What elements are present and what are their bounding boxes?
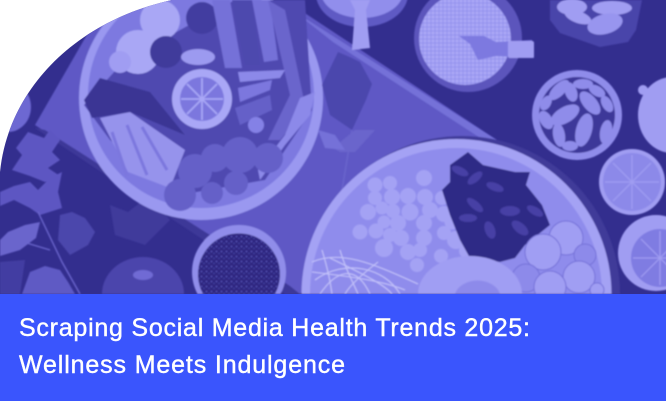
cashew dish (550, 0, 642, 47)
parsley sprig lower left (0, 130, 170, 294)
parsley on the board (318, 52, 375, 190)
lemon slice right (599, 149, 665, 215)
big plate (302, 136, 620, 294)
small dark dressing bowl (192, 225, 286, 294)
title banner (0, 294, 666, 401)
title text: Scraping Social Media Health Trends 2025: (19, 314, 530, 342)
vegetable bowl (79, 0, 323, 220)
chickpeas (352, 170, 473, 272)
avocado half (418, 256, 522, 294)
tomato halves (164, 137, 283, 211)
almond bowl (532, 70, 622, 160)
pistachio bowl (316, 0, 408, 50)
seed bowl with scoop (414, 0, 534, 92)
shredded sprouts (312, 250, 418, 294)
tomato (102, 257, 184, 294)
whole lemon (638, 77, 666, 153)
lemon slice (172, 69, 232, 129)
lemon half lower right (618, 215, 666, 291)
title text (19, 314, 530, 379)
hero photo: food flat lay in duotone (0, 0, 666, 294)
small dish at left edge (8, 94, 32, 133)
roasted vegetables (84, 0, 315, 195)
kidney beans (442, 152, 550, 262)
cutting board (35, 0, 500, 294)
title text: Wellness Meets Indulgence (19, 351, 345, 379)
cucumber slices (512, 221, 604, 294)
